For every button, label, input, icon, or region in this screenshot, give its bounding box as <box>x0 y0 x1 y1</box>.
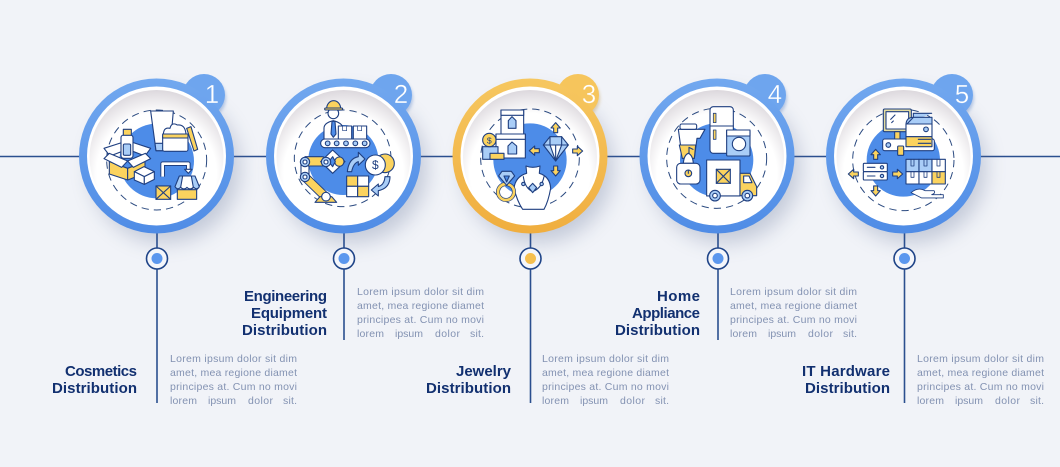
body text 4: Lorem ipsum dolor sit dim <box>730 286 857 298</box>
body text 4: sit. <box>843 328 857 340</box>
heading 5: IT Hardware <box>802 363 890 380</box>
number badge 4 <box>640 74 794 234</box>
body text 2: principes at. Cum no movi <box>357 314 484 326</box>
icon: engineering equipment <box>294 101 394 207</box>
heading 2: Engineering <box>244 288 327 305</box>
body text 3: amet, mea regione diamet <box>542 367 669 379</box>
number badge 5 <box>826 74 981 234</box>
body text 3: lorem <box>542 395 569 407</box>
body text 3 <box>542 353 669 407</box>
body text 1 <box>170 353 297 407</box>
heading 2 <box>242 288 327 339</box>
body text 1: principes at. Cum no movi <box>170 381 297 393</box>
node 4 <box>708 248 728 269</box>
body text 2: sit. <box>470 328 484 340</box>
icon: jewelry: $ <box>487 135 492 145</box>
heading 4: Home <box>657 288 700 305</box>
body text 5: lorem <box>917 395 944 407</box>
number badge 2: 2 <box>394 79 408 109</box>
panel: step 5 IT hardware <box>802 74 1044 407</box>
icon: IT hardware <box>848 109 954 211</box>
body text 4: lorem <box>730 328 757 340</box>
node 1 <box>146 248 168 269</box>
body text 4: amet, mea regione diamet <box>730 300 857 312</box>
heading 3: Jewelry <box>456 363 512 380</box>
body text 1: Lorem ipsum dolor sit dim <box>170 353 297 365</box>
panel: step 3 jewelry <box>426 74 669 407</box>
node 3 <box>520 248 541 269</box>
body text 5 <box>917 353 1044 407</box>
body text 2: amet, mea regione diamet <box>357 300 484 312</box>
heading 2: Equipment <box>251 305 327 322</box>
body text 5: dolor <box>995 395 1020 407</box>
node 2 <box>334 248 354 269</box>
body text 4: dolor <box>808 328 834 340</box>
heading 4: Distribution <box>615 322 700 339</box>
body text 2: ipsum <box>395 328 423 340</box>
panel: step 1 cosmetics <box>52 74 297 407</box>
heading 2: Distribution <box>242 322 327 339</box>
heading 1 <box>52 363 137 397</box>
body text 3: principes at. Cum no movi <box>542 381 669 393</box>
body text 2: dolor <box>435 328 460 340</box>
number badge 2 <box>266 74 421 234</box>
panel: step 2 engineering equipment <box>242 74 484 340</box>
body text 4 <box>730 286 857 340</box>
body text 5: sit. <box>1030 395 1044 407</box>
icon: engineering equipment: $ <box>372 158 379 172</box>
body text 5: amet, mea regione diamet <box>917 367 1044 379</box>
body text 1: sit. <box>283 395 297 407</box>
number badge 4: 4 <box>768 79 782 109</box>
body text 1: dolor <box>248 395 274 407</box>
heading 3 <box>426 363 512 397</box>
number badge 3 <box>452 74 608 234</box>
body text 2: Lorem ipsum dolor sit dim <box>357 286 484 298</box>
number badge 5: 5 <box>955 79 969 109</box>
body text 1: lorem <box>170 395 197 407</box>
horizontal timeline <box>0 156 1060 158</box>
body text 5: ipsum <box>955 395 983 407</box>
body text 3: dolor <box>620 395 646 407</box>
number badge 3: 3 <box>582 79 596 109</box>
node 5 <box>894 248 915 269</box>
body text 5: Lorem ipsum dolor sit dim <box>917 353 1044 365</box>
body text 1: ipsum <box>208 395 236 407</box>
heading 1: Distribution <box>52 380 137 397</box>
icon: jewelry <box>481 109 583 209</box>
body text 2 <box>357 286 484 340</box>
number badge 1: 1 <box>205 79 219 109</box>
body text 2: lorem <box>357 328 384 340</box>
icon: cosmetics boxes and shop <box>104 110 207 210</box>
body text 3: sit. <box>655 395 669 407</box>
heading 4: Appliance <box>632 305 700 322</box>
body text 1: amet, mea regione diamet <box>170 367 297 379</box>
body text 4: principes at. Cum no movi <box>730 314 857 326</box>
heading 5: Distribution <box>805 380 890 397</box>
body text 4: ipsum <box>768 328 796 340</box>
heading 3: Distribution <box>426 380 511 397</box>
body text 5: principes at. Cum no movi <box>917 381 1044 393</box>
body text 3: Lorem ipsum dolor sit dim <box>542 353 669 365</box>
icon: home appliances <box>667 107 767 208</box>
heading 1: Cosmetics <box>65 363 137 380</box>
heading 4 <box>615 288 700 339</box>
body text 3: ipsum <box>580 395 608 407</box>
panel: step 4 home appliance <box>615 74 857 340</box>
heading 5 <box>802 363 890 397</box>
number badge 1 <box>79 74 234 234</box>
